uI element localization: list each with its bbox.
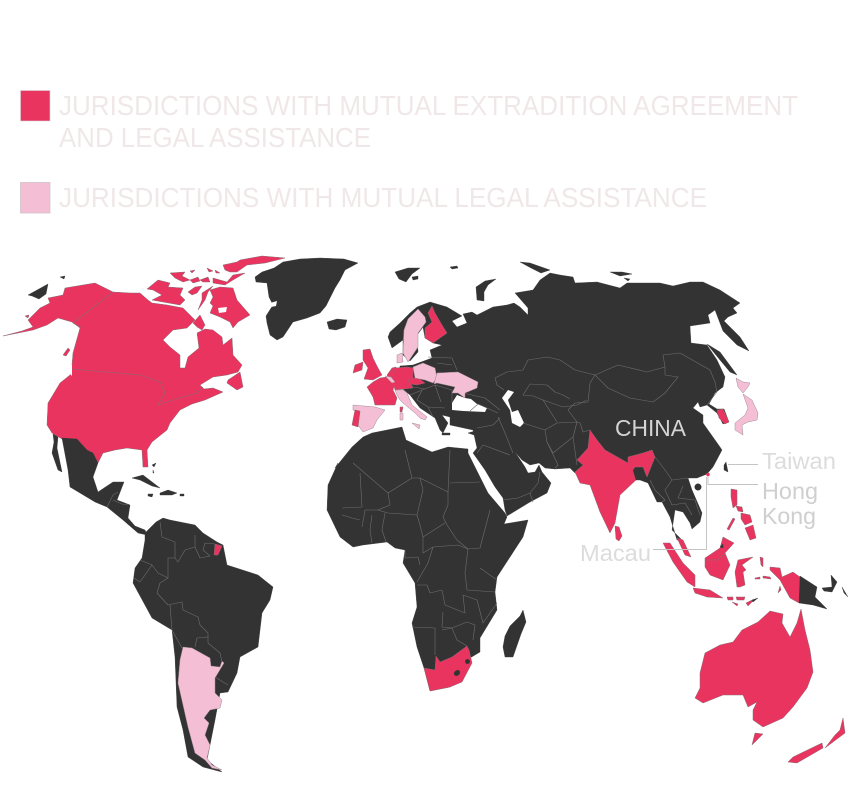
Canada arctic islands: [223, 256, 285, 272]
Seram and Buru: [755, 577, 760, 579]
Taiwan leader: [728, 464, 758, 466]
Argentina: [178, 647, 224, 770]
South America borders: [134, 522, 228, 685]
Portugal: [352, 410, 360, 427]
Tasmania: [752, 733, 763, 745]
Philippines: [731, 489, 737, 508]
Sakhalin: [707, 344, 737, 375]
Taiwan: [724, 462, 728, 472]
South Africa: [424, 646, 472, 691]
Greenland bay: [270, 301, 277, 307]
Belgium: [385, 376, 395, 383]
Macau leader: [653, 477, 706, 550]
leader lines: [653, 464, 758, 550]
Mediterranean islands: [442, 431, 475, 435]
label: Hong Kong: Hong: [762, 478, 818, 504]
Java: [693, 588, 723, 598]
Sweden: [403, 309, 426, 362]
label: Taiwan: Taiwan: [762, 448, 836, 474]
South Korea: [717, 409, 729, 424]
Denmark: [397, 353, 403, 363]
Sardinia: [400, 413, 403, 420]
Timor: [746, 600, 753, 606]
Asia borders: [477, 353, 717, 515]
Caribbean islands: [132, 463, 184, 497]
legend label: extradition and legal assistance: JURISDICTIONS WITH MUTUAL EXTRADITION AGREEMENT: [59, 90, 798, 121]
Madagascar: [503, 610, 526, 657]
New Zealand north: [825, 718, 845, 748]
Southeast Asia and Oceania: [663, 489, 848, 763]
Finland: [425, 306, 447, 343]
France: [367, 377, 397, 405]
label: Hong Kong: Kong: [762, 503, 816, 529]
Italy and Switzerland: [395, 390, 427, 420]
Europe borders: [403, 327, 500, 417]
Czech Republic: [408, 377, 425, 385]
Malay Peninsula: [677, 538, 691, 557]
Borneo: [705, 537, 734, 580]
Germany: [387, 367, 413, 390]
Europe red and pink jurisdictions: [352, 306, 478, 432]
Hainan: [695, 484, 701, 490]
label: China: CHINA: [615, 415, 687, 441]
Australia: [695, 609, 813, 727]
Spain: [353, 405, 385, 432]
swatch: legal assistance: [20, 182, 50, 213]
Swaziland: [465, 659, 470, 664]
Netherlands: [387, 367, 396, 378]
Lesser Sunda Islands: [727, 597, 733, 600]
swatch: extradition and legal assistance: [20, 90, 50, 121]
French Guiana: [214, 544, 222, 555]
North America red: [3, 256, 285, 467]
Arctic islands of Russia: [395, 262, 632, 301]
Corsica: [400, 407, 403, 412]
Iceland: [327, 319, 347, 330]
legend label: legal assistance: JURISDICTIONS WITH MUTUAL LEGAL ASSISTANCE: [59, 182, 707, 213]
Africa borders: [342, 450, 497, 655]
Japan: [735, 378, 758, 435]
Papua New Guinea: [799, 576, 827, 609]
South America: [133, 518, 273, 772]
Sicily: [412, 423, 420, 429]
Russia Chukotka tip: [28, 284, 48, 299]
Lesotho: [453, 669, 461, 677]
New Britain and Solomon Islands: [822, 575, 837, 592]
Eurasia landmass: [388, 273, 749, 541]
India: [575, 430, 655, 533]
Western New Guinea: [770, 567, 800, 603]
New Zealand south: [788, 743, 823, 763]
Sri Lanka: [615, 526, 622, 541]
Caspian Sea: [502, 390, 524, 427]
world map: [3, 256, 848, 772]
small Bering islands: [60, 276, 65, 279]
Bangladesh: [633, 468, 645, 480]
legend label: extradition and legal assistance: AND LEGAL ASSISTANCE: [59, 122, 371, 153]
Black Sea: [452, 395, 487, 412]
Hong Kong: [706, 473, 710, 476]
Greenland: [255, 258, 358, 340]
United Kingdom: [363, 349, 382, 380]
Sumatra: [663, 543, 695, 587]
Canada and US borders: [72, 292, 203, 405]
Hong Kong leader: [708, 476, 758, 484]
legend: [20, 90, 798, 213]
Ukraine: [434, 372, 478, 398]
Mexico and Central America: [52, 434, 147, 535]
Poland: [413, 363, 437, 383]
Ireland: [353, 362, 363, 373]
Halmahera: [760, 557, 763, 567]
Africa: [327, 427, 528, 691]
Sulawesi: [735, 557, 753, 587]
label: Macau: Macau: [580, 540, 651, 566]
